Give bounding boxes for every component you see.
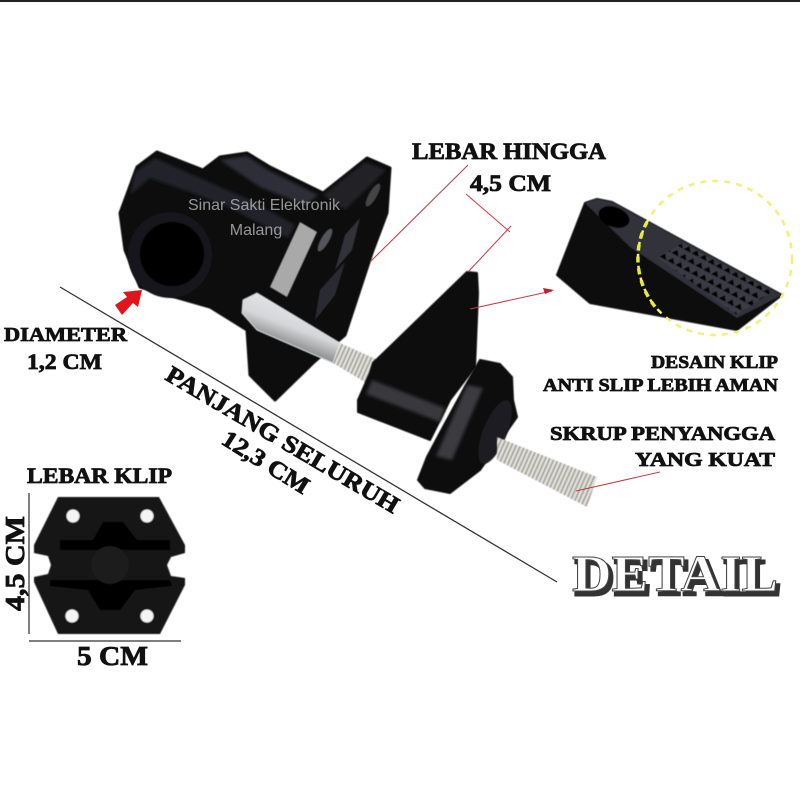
screw end: [497, 437, 597, 507]
clip dimension lines: [29, 493, 181, 641]
wedge body: [557, 199, 782, 330]
cylinder highlight: [366, 380, 445, 422]
label: desain klip: DESAIN KLIP: [651, 352, 778, 372]
L-shaped bolt: [242, 293, 340, 363]
dashed yellow circle: [638, 181, 792, 335]
wedge clip detail: [557, 199, 782, 330]
star knob: [418, 360, 517, 493]
label: 5 cm: 5 CM: [77, 641, 148, 671]
mounting holes: [66, 510, 154, 622]
watermark: Sinar Sakti Elektronik: [188, 197, 341, 214]
tube opening ring: [128, 212, 212, 298]
wedge top face: [585, 199, 782, 318]
watermark: Malang: [230, 222, 282, 239]
arrow head: [543, 288, 554, 294]
label: diameter: DIAMETER: [4, 324, 128, 346]
label: lebar hingga: LEBAR HINGGA: [412, 139, 606, 164]
label: panjang seluruh: PANJANG SELURUH: [161, 362, 404, 519]
clamp product photo: [120, 152, 597, 507]
watermark: [188, 197, 341, 239]
detail title: DETAIL: [572, 546, 778, 603]
label: 12,3 cm: 12,3 CM: [217, 426, 314, 500]
label: lebar hingga: [412, 139, 606, 196]
label: skrup penyangga: SKRUP PENYANGGA: [550, 423, 776, 445]
label: lebar klip: LEBAR KLIP: [27, 463, 172, 488]
long dimension line: [60, 287, 557, 582]
leader lines: [370, 165, 660, 491]
label: skrup penyangga: [550, 423, 776, 471]
detail title: DETAIL: [575, 550, 781, 607]
anti-slip texture: [657, 243, 772, 315]
clip plate: [34, 497, 185, 634]
triangular clip with cylinder: [358, 272, 478, 440]
grey plate edge: [270, 222, 317, 297]
bolt threads: [333, 343, 378, 384]
label: diameter: 1,2 CM: [27, 349, 102, 374]
label: desain klip: [543, 352, 778, 395]
clamp body: [120, 152, 390, 400]
top border line: [0, 0, 800, 2]
label: 4,5 cm vertical: 4,5 CM: [0, 516, 30, 611]
label: skrup penyangga: YANG KUAT: [635, 449, 776, 471]
center boss: [91, 546, 129, 584]
label: diameter: [4, 324, 128, 374]
body highlights: [130, 156, 386, 238]
wedge hole: [596, 202, 632, 232]
label: lebar hingga: 4,5 CM: [470, 171, 551, 196]
red arrow: diameter: [115, 290, 142, 315]
label: desain klip: ANTI SLIP LEBIH AMAN: [543, 375, 778, 395]
